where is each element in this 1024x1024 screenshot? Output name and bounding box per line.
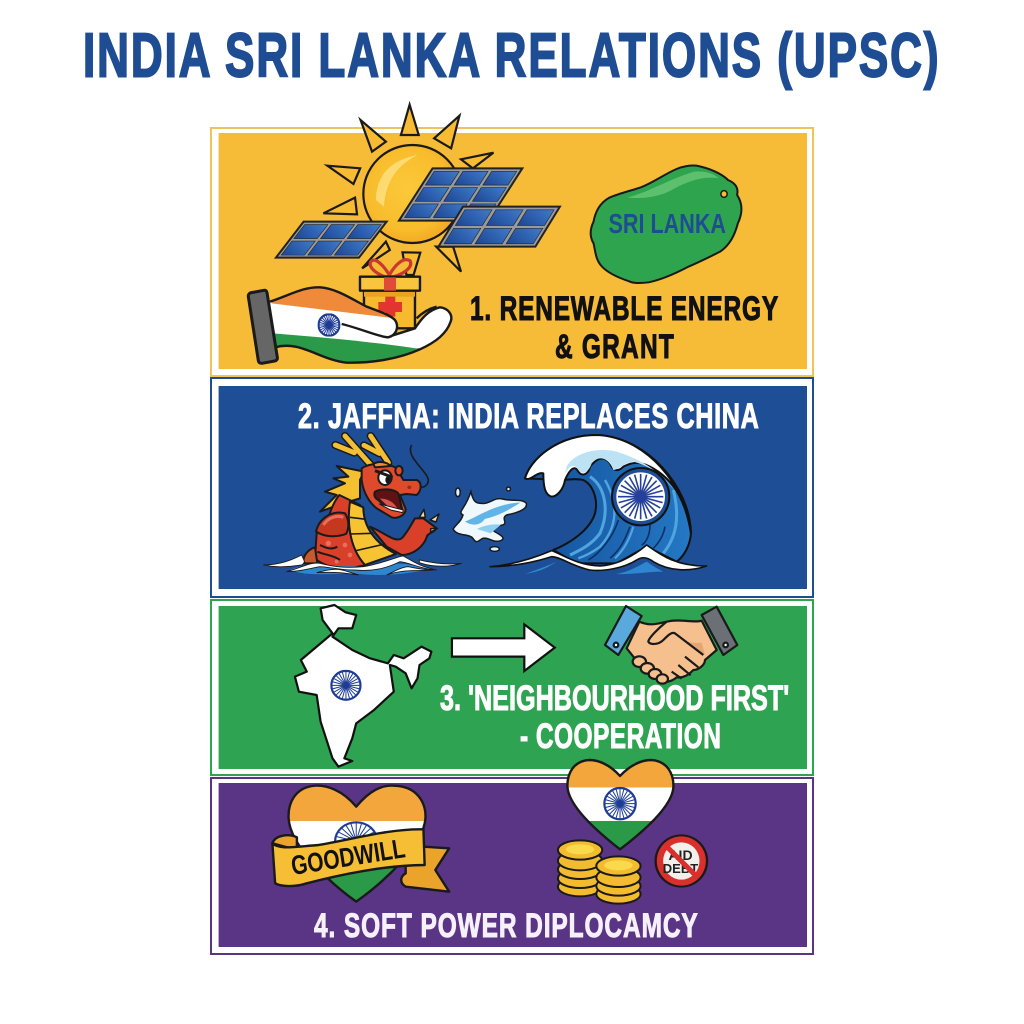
icon: no debt sign: AID <box>668 847 693 863</box>
heading: Jaffna: 2. JAFFNA: INDIA REPLACES CHINA <box>298 397 759 436</box>
icon: wave with chakra <box>490 435 707 574</box>
icon: solar panels <box>276 168 560 258</box>
icon: India map <box>295 605 431 767</box>
heading: renewable energy <box>470 290 778 366</box>
icon: no debt sign: DEBT <box>663 861 698 876</box>
ribbon tail <box>401 847 449 892</box>
icon: dragon <box>303 436 439 569</box>
wave base foam <box>525 562 663 574</box>
arm <box>370 518 437 555</box>
icon: water splash <box>453 487 526 551</box>
icon: coins <box>558 840 641 904</box>
title: INDIA SRI LANKA RELATIONS (UPSC) <box>83 21 939 90</box>
heading: renewable energy: & GRANT <box>555 328 674 366</box>
panel: renewable energy and grant <box>211 105 813 376</box>
panel: soft power diplomacy <box>211 758 813 954</box>
icon: flag heart <box>566 758 675 851</box>
panel: Jaffna <box>211 378 813 597</box>
panel: neighbourhood first <box>211 600 813 775</box>
ribbon banner <box>272 829 425 886</box>
solar panel top <box>399 168 522 221</box>
chakra emblem <box>616 472 665 521</box>
solar panel left <box>276 222 387 258</box>
icon: dragon water <box>263 555 462 575</box>
heading: neighbourhood first: 3. 'NEIGHBOURHOOD FIRST' <box>440 679 789 718</box>
icon: no debt sign <box>654 834 708 888</box>
shoulder <box>316 513 348 536</box>
belly <box>349 502 396 565</box>
head <box>362 464 421 518</box>
body <box>315 495 367 569</box>
horns <box>335 436 388 466</box>
heading: neighbourhood first <box>440 679 789 756</box>
heading: soft power: 4. SOFT POWER DIPLOCAMCY <box>314 907 698 945</box>
icon: Sri Lanka island <box>591 165 741 283</box>
icon: handshake <box>605 606 737 684</box>
icon: sun <box>323 105 493 275</box>
icon: gift box <box>360 260 420 328</box>
arrow <box>452 624 555 671</box>
icon: hand with flag holding gift <box>248 260 451 367</box>
icon: goodwill heart: GOODWILL <box>289 833 407 881</box>
wave foam <box>525 435 691 533</box>
heading: renewable energy: 1. RENEWABLE ENERGY <box>470 290 778 328</box>
heading: neighbourhood first: - COOPERATION <box>520 718 721 756</box>
solar panel right <box>438 207 560 247</box>
icon: goodwill heart <box>272 783 449 904</box>
icon: Sri Lanka island: SRI LANKA <box>608 208 726 239</box>
